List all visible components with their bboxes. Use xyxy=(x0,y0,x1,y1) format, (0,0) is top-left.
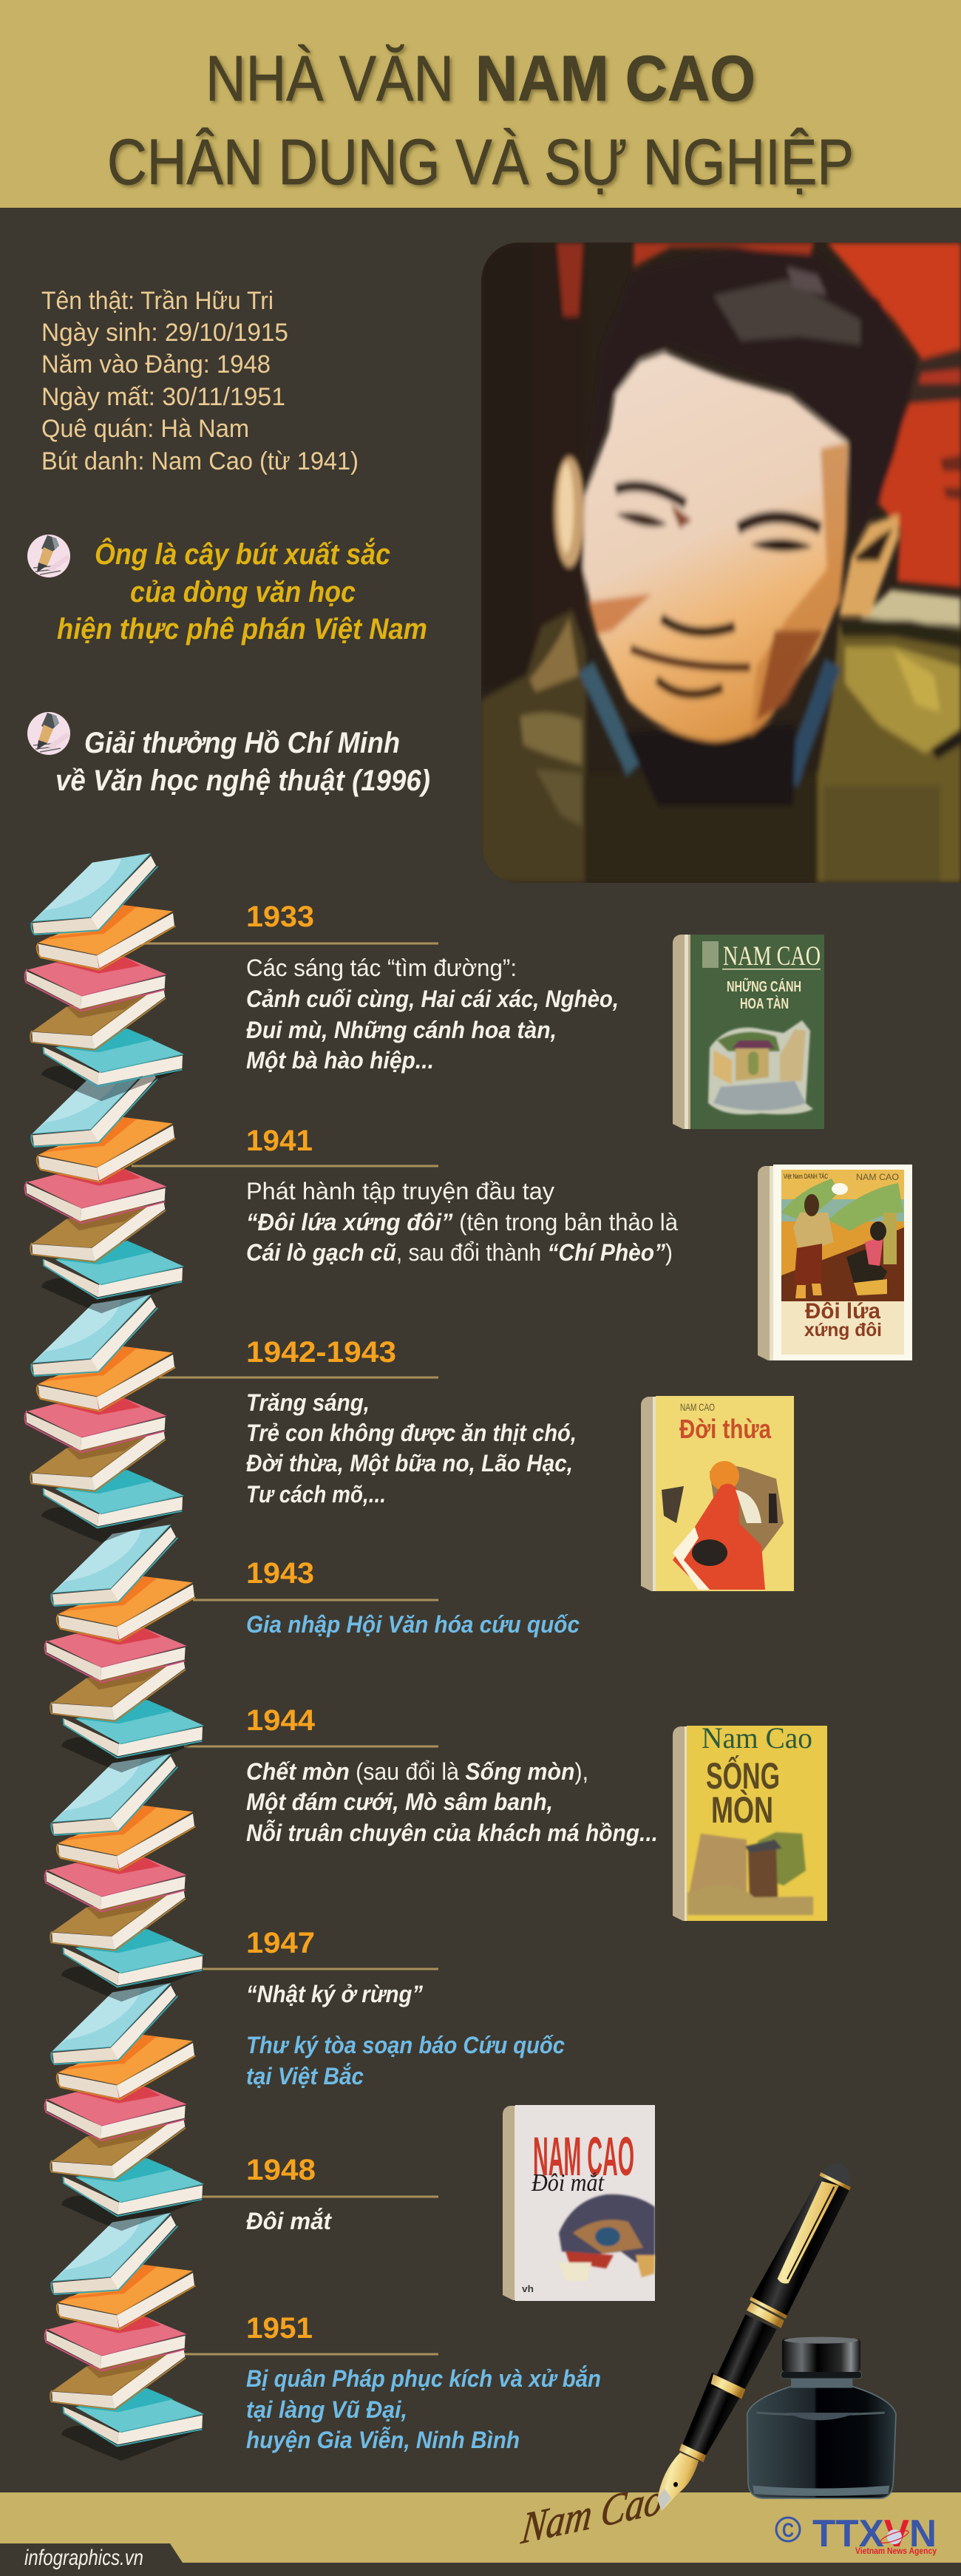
timeline entry 1943 xyxy=(193,1557,580,1638)
quote: literary standing xyxy=(57,537,427,645)
TTXVN logo: TTXVN xyxy=(812,2512,937,2555)
timeline entry 1933: Cảnh cuối cùng, Hai cái xác, Nghèo, xyxy=(246,986,619,1012)
book stack 6 xyxy=(45,1983,203,2231)
timeline entry 1933: 1933 xyxy=(246,901,314,933)
fountain pen xyxy=(657,2163,850,2511)
timeline entry 1941 xyxy=(132,1125,678,1266)
timeline entry 1943: Gia nhập Hội Văn hóa cứu quốc xyxy=(246,1611,580,1638)
ink bottle xyxy=(747,2337,896,2498)
timeline entry 1948 xyxy=(203,2154,438,2234)
website tag: infographics.vn xyxy=(24,2546,143,2570)
timeline entry 1942-1943: Trăng sáng, xyxy=(246,1389,370,1416)
timeline entry 1944 xyxy=(184,1704,658,1846)
title: NHÀ VĂN xyxy=(206,43,454,115)
quote: literary standing: hiện thực phê phán Việt Nam xyxy=(57,613,427,645)
book cover: Đôi lứa xứng đôi: xứng đôi xyxy=(804,1320,882,1340)
timeline entry 1947: 1947 xyxy=(246,1927,315,1959)
timeline entry 1944: Một đám cưới, Mò sâm banh, xyxy=(246,1789,553,1815)
timeline entry 1947 xyxy=(203,1927,565,2089)
timeline entry 1942-1943: 1942-1943 xyxy=(246,1336,396,1369)
timeline entry 1951: tại làng Vũ Đại, xyxy=(246,2396,407,2423)
timeline entry 1933: Một bà hào hiệp... xyxy=(246,1047,434,1074)
timeline entry 1951: huyện Gia Viễn, Ninh Bình xyxy=(246,2427,520,2453)
book cover: Đôi lứa xứng đôi: Việt Nam DANH TÁC xyxy=(784,1173,828,1180)
personal information list: Ngày mất: 30/11/1951 xyxy=(41,383,285,411)
timeline entry 1941: Cái lò gạch cũ, sau đổi thành “Chí Phèo”) xyxy=(246,1239,673,1266)
quote: Ho Chi Minh award: về Văn học nghệ thuật (1996) xyxy=(55,765,430,797)
book cover: Đôi mắt xyxy=(503,2105,655,2301)
timeline entry 1944: Nỗi truân chuyên của khách má hồng... xyxy=(246,1820,658,1846)
timeline entry 1951: 1951 xyxy=(246,2312,313,2345)
book cover: Những cánh hoa tàn xyxy=(673,935,824,1129)
book cover: Đôi mắt: Đôi mắt xyxy=(531,2169,605,2197)
title xyxy=(107,43,854,198)
timeline entry 1951: Bị quân Pháp phục kích và xử bắn xyxy=(246,2365,601,2392)
book cover: Sống mòn: MÒN xyxy=(711,1789,773,1831)
book cover: Đôi lứa xứng đôi: NAM CAO xyxy=(856,1172,899,1182)
book stack 1 xyxy=(25,853,183,1101)
book cover: Những cánh hoa tàn: NHỮNG CÁNH xyxy=(727,977,801,995)
timeline entry 1943: 1943 xyxy=(246,1557,314,1590)
timeline entry 1947: “Nhật ký ở rừng” xyxy=(246,1981,423,2007)
footer band xyxy=(0,2492,961,2576)
timeline entry 1942-1943: Trẻ con không được ăn thịt chó, xyxy=(246,1420,577,1446)
portrait photo of Nam Cao xyxy=(480,243,961,883)
title: NAM CAO xyxy=(475,43,755,115)
book cover: Sống mòn: Nam Cao xyxy=(702,1721,812,1755)
timeline entry 1942-1943: Đời thừa, Một bữa no, Lão Hạc, xyxy=(246,1450,573,1477)
personal information list: Bút danh: Nam Cao (từ 1941) xyxy=(41,447,359,475)
timeline entry 1948: Đôi mắt xyxy=(246,2208,332,2234)
book cover: Sống mòn xyxy=(673,1721,827,1921)
book stack 3 xyxy=(25,1295,183,1542)
timeline entry 1941: “Đôi lứa xứng đôi” (tên trong bản thảo là xyxy=(246,1209,678,1236)
icon: pen nib 1 xyxy=(27,535,70,577)
quote: literary standing: Ông là cây bút xuất sắc xyxy=(95,537,390,571)
personal information list: Quê quán: Hà Nam xyxy=(41,415,249,443)
timeline entry 1933: Các sáng tác “tìm đường”: xyxy=(246,955,517,981)
book cover: Đời thừa: Đời thừa xyxy=(679,1414,772,1444)
TTXVN logo: Vietnam News Agency xyxy=(855,2546,937,2556)
timeline entry 1941: Phát hành tập truyện đầu tay xyxy=(246,1178,554,1204)
quote: Ho Chi Minh award xyxy=(55,727,430,797)
signature Nam Cao: Nam Cao xyxy=(519,2473,665,2553)
timeline entry 1944: 1944 xyxy=(246,1704,316,1737)
book cover: Đôi lứa xứng đôi xyxy=(758,1165,912,1360)
text: NAM CAO xyxy=(533,2126,634,2187)
title: CHÂN DUNG VÀ SỰ NGHIỆP xyxy=(107,126,854,198)
book cover: Những cánh hoa tàn: HOA TÀN xyxy=(740,995,789,1012)
timeline entry 1941: 1941 xyxy=(246,1125,313,1157)
book cover: Những cánh hoa tàn: NAM CAO xyxy=(723,941,821,972)
book cover: Đôi lứa xứng đôi: Đôi lứa xyxy=(805,1299,880,1323)
quote: Ho Chi Minh award: Giải thưởng Hồ Chí Minh xyxy=(84,727,400,759)
header banner xyxy=(0,0,961,208)
book cover: Đời thừa: NAM CAO xyxy=(680,1401,715,1413)
quote: literary standing: của dòng văn học xyxy=(130,576,356,609)
book stack 4 xyxy=(45,1525,203,1772)
timeline entry 1942-1943: Tư cách mõ,... xyxy=(246,1481,386,1508)
book stack 2 xyxy=(25,1065,183,1313)
website tag xyxy=(0,2543,183,2576)
personal information list xyxy=(41,287,359,475)
book cover: Đời thừa xyxy=(641,1396,794,1591)
icon: pen nib 2 xyxy=(27,712,70,755)
timeline entry 1947: Thư ký tòa soạn báo Cứu quốc xyxy=(246,2032,565,2058)
timeline entry 1933 xyxy=(140,901,619,1074)
book cover: Đôi mắt: vh xyxy=(522,2283,534,2294)
TTXVN logo: C xyxy=(782,2519,794,2541)
timeline entry 1942-1943 xyxy=(159,1336,577,1508)
book stack 5 xyxy=(45,1754,203,2002)
book stack 7 xyxy=(45,2213,203,2461)
personal information list: Tên thật: Trần Hữu Tri xyxy=(41,287,274,315)
personal information list: Ngày sinh: 29/10/1915 xyxy=(41,319,288,347)
timeline entry 1944: Chết mòn (sau đổi là Sống mòn), xyxy=(246,1758,588,1785)
timeline entry 1933: Đui mù, Những cánh hoa tàn, xyxy=(246,1017,557,1043)
timeline entry 1948: 1948 xyxy=(246,2154,316,2186)
book cover: Sống mòn: SỐNG xyxy=(706,1755,780,1797)
personal information list: Năm vào Đảng: 1948 xyxy=(41,350,271,379)
timeline entry 1947: tại Việt Bắc xyxy=(246,2063,364,2089)
timeline entry 1951 xyxy=(184,2312,601,2453)
